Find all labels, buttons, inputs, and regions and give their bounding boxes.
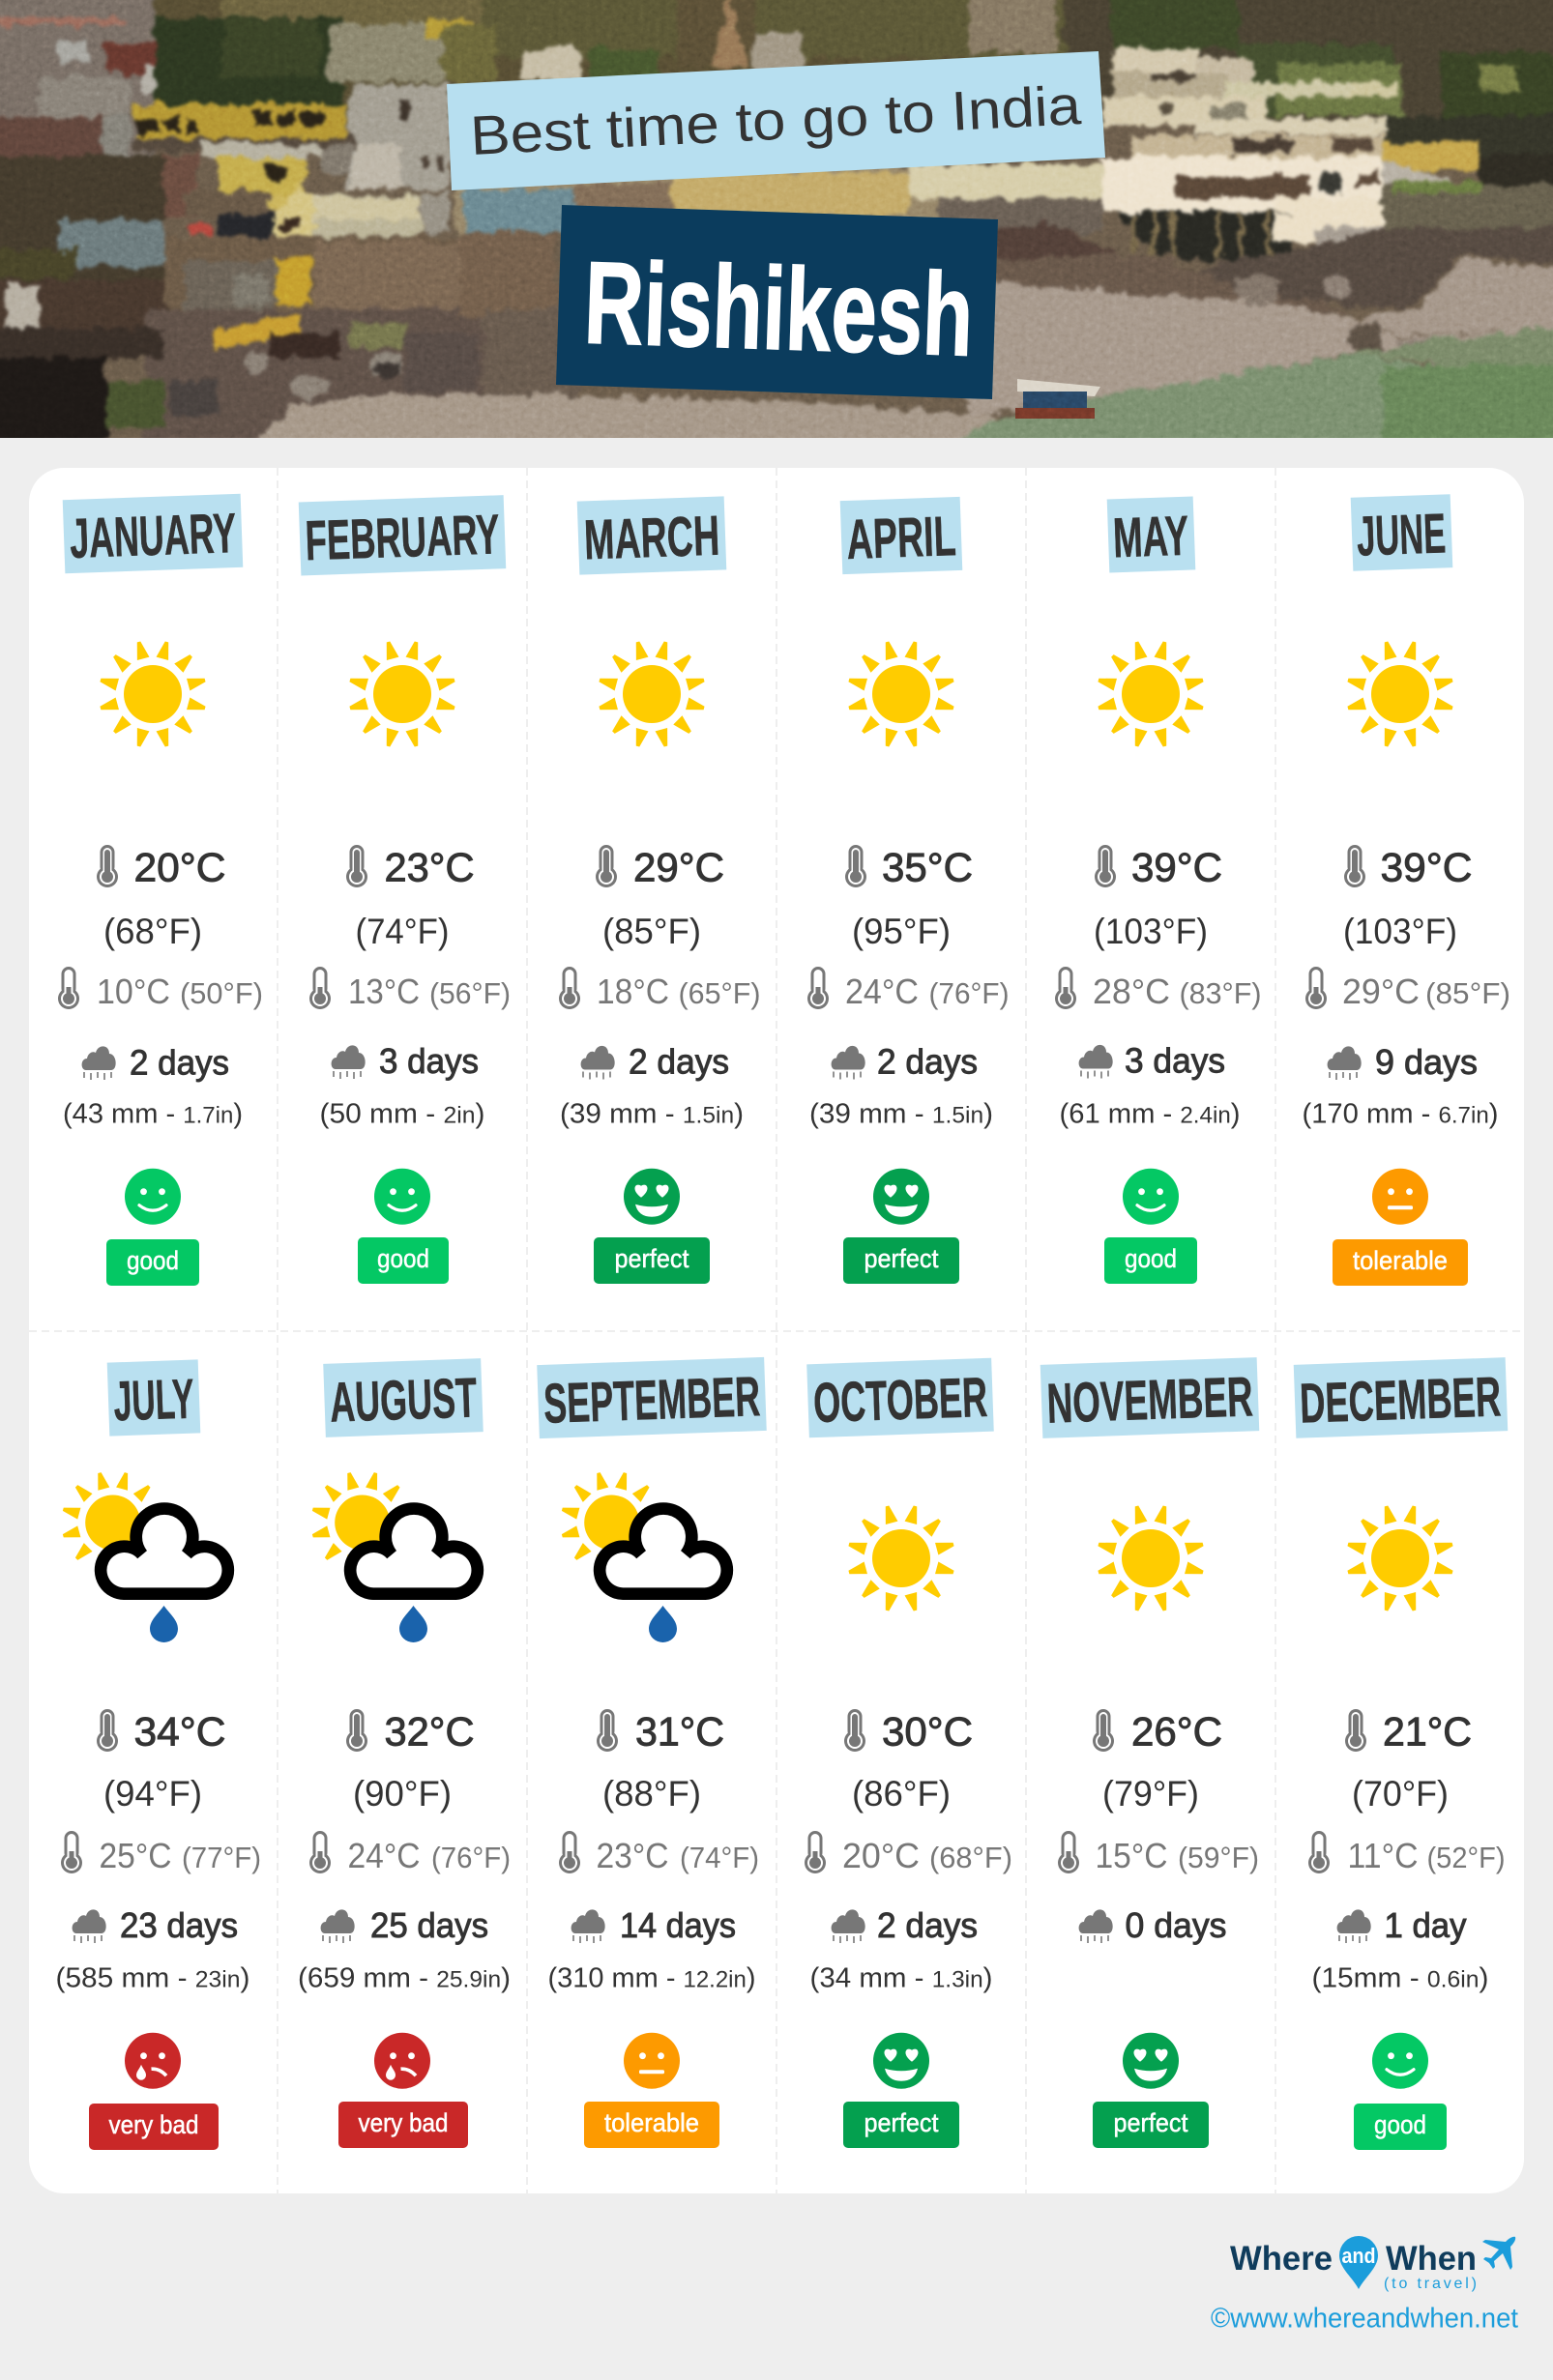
high temperature fahrenheit: (85°F): [602, 912, 701, 951]
low temperature: 10°C: [97, 972, 170, 1011]
icon: tolerable face: [1372, 1169, 1428, 1225]
icon: rain cloud: [1328, 1046, 1362, 1080]
rainfall: (659 mm - 25.9in): [298, 1963, 511, 1994]
high temperature: 30°C: [882, 1709, 973, 1755]
rating badge: [1333, 1239, 1468, 1286]
icon: perfect face: [1123, 2033, 1179, 2089]
heading: November: [1040, 1357, 1259, 1438]
low temperature: 23°C: [596, 1836, 669, 1875]
icon: rain cloud: [1079, 1909, 1113, 1943]
heading: April: APRIL: [845, 505, 957, 571]
sand: [257, 389, 997, 438]
water: [961, 351, 1427, 438]
low temperature fahrenheit: (77°F): [182, 1841, 261, 1874]
icon: sun behind rain cloud: [311, 1471, 478, 1642]
rainy days: 0 days: [1126, 1905, 1226, 1945]
high temperature fahrenheit: (86°F): [852, 1774, 951, 1814]
icon: thermometer high: [845, 845, 866, 887]
boat: [1015, 379, 1100, 419]
high temperature fahrenheit: (88°F): [602, 1774, 701, 1814]
rating badge: [594, 1237, 710, 1284]
panel: March: [559, 496, 760, 1284]
icon: thermometer low: [805, 1831, 826, 1873]
heading: February: FEBRUARY: [305, 503, 501, 572]
rainy days: 3 days: [379, 1041, 479, 1081]
low temperature fahrenheit: (65°F): [679, 976, 760, 1010]
icon: thermometer low: [1305, 967, 1327, 1009]
panel: July: [56, 1359, 261, 2150]
icon: map pin with and: and: [1342, 2244, 1375, 2268]
low temperature: 24°C: [845, 972, 919, 1011]
icon: sun behind rain cloud: [62, 1471, 228, 1642]
high temperature fahrenheit: (90°F): [353, 1774, 452, 1814]
rating badge: [1354, 2104, 1447, 2150]
rainfall: (43 mm - 1.7in): [63, 1099, 243, 1130]
right hotel: [1112, 48, 1199, 73]
high temperature: 20°C: [133, 845, 226, 890]
low temperature fahrenheit: (85°F): [1425, 976, 1510, 1010]
right wall and rocks: [1383, 142, 1480, 171]
panel: November: [1040, 1357, 1259, 2148]
icon: sun behind rain cloud: [561, 1471, 727, 1642]
icon: sun: [1097, 640, 1205, 748]
heading: September: [537, 1357, 767, 1438]
wall and rubble: [213, 232, 280, 249]
heading: June: JUNE: [1356, 502, 1447, 568]
low temperature: 29°C: [1342, 972, 1420, 1011]
rating badge: good: [377, 1244, 429, 1273]
icon: thermometer high: [346, 1709, 367, 1752]
high temperature fahrenheit: (74°F): [356, 912, 449, 951]
icon: perfect face: [873, 2033, 929, 2089]
rainfall: (39 mm - 1.5in): [560, 1099, 744, 1130]
high temperature fahrenheit: (103°F): [1094, 912, 1208, 951]
logo word: When: When: [1386, 2240, 1477, 2278]
low temperature: 25°C: [99, 1836, 172, 1875]
icon: thermometer low: [61, 1831, 82, 1873]
rating badge: [1093, 2102, 1209, 2148]
icon: thermometer low: [559, 1831, 580, 1873]
icon: rain cloud: [332, 1045, 366, 1079]
low temperature fahrenheit: (83°F): [1180, 976, 1261, 1010]
heading: July: JULY: [112, 1368, 195, 1433]
header photo: Rishikesh riverside: [0, 0, 1553, 467]
rainy days: 2 days: [130, 1043, 229, 1083]
panel: January: [58, 494, 263, 1286]
heading: July: [107, 1359, 200, 1437]
high temperature fahrenheit: (95°F): [852, 912, 951, 951]
panel: February: [299, 495, 511, 1284]
icon: good face: [125, 1169, 181, 1225]
rating badge: [584, 2102, 719, 2148]
heading: April: [840, 497, 962, 574]
rating badge: [358, 1237, 449, 1284]
rating badge: [106, 1239, 199, 1286]
high temperature: 26°C: [1131, 1709, 1222, 1755]
icon: thermometer high: [596, 845, 617, 887]
icon: plane: [1482, 2237, 1515, 2270]
rainy days: 9 days: [1375, 1042, 1478, 1082]
heading: September: SEPTEMBER: [542, 1365, 761, 1436]
high temperature: 21°C: [1383, 1709, 1472, 1755]
centre buildings: [679, 0, 753, 56]
icon: thermometer high: [97, 1709, 118, 1752]
rainfall: (170 mm - 6.7in): [1302, 1099, 1499, 1130]
high temperature: 35°C: [882, 845, 973, 890]
rainy days: 14 days: [620, 1905, 736, 1945]
icon: thermometer low: [559, 967, 580, 1009]
panel: September: [537, 1357, 767, 2148]
copyright url: ©www.whereandwhen.net: [1211, 2304, 1518, 2335]
rating badge: tolerable: [1353, 1246, 1448, 1275]
rainy days: 2 days: [877, 1905, 978, 1945]
rating badge: [843, 1237, 959, 1284]
panel: October: [805, 1358, 1012, 2148]
high temperature fahrenheit: (103°F): [1343, 912, 1457, 951]
rainy days: 25 days: [370, 1905, 488, 1945]
icon: tolerable face: [624, 2033, 680, 2089]
icon: good face: [374, 1169, 430, 1225]
icon: thermometer high: [844, 1709, 865, 1752]
rating badge: perfect: [864, 1244, 939, 1273]
low temperature: 13°C: [348, 972, 420, 1011]
icon: thermometer high: [1095, 845, 1116, 887]
panel: April: [807, 497, 1010, 1284]
icon: sun: [1346, 1504, 1454, 1612]
low temperature fahrenheit: (52°F): [1427, 1841, 1505, 1874]
rainfall: (39 mm - 1.5in): [809, 1099, 993, 1130]
icon: thermometer high: [346, 845, 367, 887]
icon: perfect face: [624, 1169, 680, 1225]
low temperature: 20°C: [842, 1836, 920, 1875]
icon: rain cloud: [832, 1909, 865, 1943]
heading: May: [1107, 496, 1195, 573]
low temperature fahrenheit: (76°F): [431, 1841, 511, 1874]
icon: perfect face: [873, 1169, 929, 1225]
icon: rain cloud: [581, 1046, 615, 1079]
icon: rain cloud: [832, 1046, 865, 1079]
rating badge: tolerable: [604, 2108, 699, 2137]
rating badge: very bad: [108, 2110, 199, 2139]
heading: October: [806, 1358, 994, 1437]
icon: rain cloud: [73, 1909, 106, 1943]
low temperature: 28°C: [1093, 972, 1170, 1011]
heading: November: NOVEMBER: [1046, 1365, 1254, 1436]
icon: rain cloud: [1337, 1909, 1371, 1943]
rating badge: good: [127, 1246, 179, 1275]
rainfall: (50 mm - 2in): [319, 1099, 485, 1130]
icon: sun: [598, 640, 706, 748]
rainfall: (34 mm - 1.3in): [810, 1963, 992, 1994]
high temperature: 34°C: [133, 1709, 226, 1755]
rainy days: 23 days: [120, 1905, 238, 1945]
rating badge: good: [1125, 1244, 1177, 1273]
high temperature: 39°C: [1381, 845, 1472, 890]
rating badge: perfect: [1114, 2108, 1188, 2137]
icon: thermometer high: [1345, 1709, 1366, 1752]
panel: December: [1294, 1357, 1508, 2150]
rainfall: (585 mm - 23in): [56, 1963, 249, 1994]
rating badge: [843, 2102, 959, 2148]
low temperature fahrenheit: (68°F): [929, 1841, 1012, 1874]
rainy days: 2 days: [877, 1042, 978, 1081]
left buildings: [0, 0, 155, 155]
icon: thermometer high: [597, 1709, 618, 1752]
icon: rain cloud: [571, 1909, 605, 1943]
panel: August: [298, 1358, 511, 2148]
title banner: Best time to go to India: Best time to go to India: [469, 74, 1083, 167]
low temperature fahrenheit: (74°F): [680, 1841, 759, 1874]
icon: thermometer high: [97, 845, 118, 887]
rating badge: very bad: [358, 2108, 449, 2137]
rating badge: good: [1374, 2110, 1426, 2139]
low temperature fahrenheit: (56°F): [429, 976, 511, 1010]
rating badge: [89, 2104, 219, 2150]
rating badge: [338, 2102, 468, 2148]
high temperature fahrenheit: (79°F): [1102, 1774, 1199, 1814]
icon: rain cloud: [82, 1046, 116, 1080]
months card: [29, 468, 1524, 2193]
heading: October: OCTOBER: [812, 1366, 988, 1435]
heading: May: MAY: [1112, 505, 1189, 569]
rating badge: perfect: [864, 2108, 939, 2137]
title banner: Rishikesh: [556, 205, 998, 399]
rainy days: 3 days: [1125, 1040, 1225, 1081]
rainfall: (61 mm - 2.4in): [1060, 1099, 1240, 1130]
icon: rain cloud: [321, 1909, 355, 1943]
heading: March: [577, 496, 726, 575]
title banner: Best time to go to India: [447, 51, 1105, 190]
rainfall: (15mm - 0.6in): [1311, 1963, 1489, 1994]
icon: thermometer low: [1058, 1831, 1079, 1873]
logo word: Where: Where: [1230, 2240, 1333, 2278]
icon: good face: [1123, 1169, 1179, 1225]
low temperature fahrenheit: (76°F): [928, 976, 1010, 1010]
high temperature fahrenheit: (70°F): [1352, 1774, 1449, 1814]
icon: thermometer high: [1344, 845, 1365, 887]
heading: August: AUGUST: [329, 1366, 478, 1435]
rainy days: 2 days: [629, 1042, 729, 1081]
icon: thermometer low: [807, 967, 829, 1009]
icon: thermometer low: [1055, 967, 1076, 1009]
icon: thermometer low: [1308, 1831, 1330, 1873]
high temperature: 23°C: [385, 845, 474, 890]
icon: good face: [1372, 2033, 1428, 2089]
panel: June: [1302, 494, 1510, 1286]
rainy days: 1 day: [1385, 1905, 1466, 1945]
logo tagline: (to travel): [1384, 2276, 1477, 2292]
rainfall: (310 mm - 12.2in): [547, 1963, 756, 1994]
heading: June: [1351, 494, 1452, 571]
logo: Where and When: [1230, 2236, 1515, 2292]
icon: thermometer low: [309, 967, 331, 1009]
low temperature: 15°C: [1095, 1836, 1168, 1875]
low temperature: 18°C: [597, 972, 669, 1011]
title banner: Rishikesh: Rishikesh: [582, 236, 976, 381]
heading: January: [63, 494, 243, 573]
high temperature: 39°C: [1131, 845, 1222, 890]
icon: map pin with and: [1339, 2236, 1378, 2289]
heading: August: [323, 1358, 483, 1437]
high temperature: 31°C: [635, 1709, 724, 1755]
icon: sun: [99, 640, 207, 748]
icon: sun: [1097, 1504, 1205, 1612]
low temperature: 11°C: [1348, 1836, 1418, 1875]
low temperature fahrenheit: (50°F): [180, 976, 263, 1010]
panel: May: [1055, 496, 1261, 1284]
icon: sun: [847, 640, 955, 748]
icon: thermometer low: [309, 1831, 331, 1873]
low temperature: 24°C: [348, 1836, 420, 1875]
icon: sun: [1346, 640, 1454, 748]
high temperature: 29°C: [633, 845, 724, 890]
icon: rain cloud: [1079, 1045, 1113, 1079]
rating badge: perfect: [615, 1244, 689, 1273]
icon: very bad face: [125, 2033, 181, 2089]
low temperature fahrenheit: (59°F): [1178, 1841, 1259, 1874]
left tree, bare branches: [0, 155, 164, 280]
heading: February: [299, 495, 506, 575]
high temperature fahrenheit: (94°F): [103, 1774, 202, 1814]
heading: March: MARCH: [583, 505, 720, 571]
high temperature: 32°C: [385, 1709, 474, 1755]
rating badge: [1104, 1237, 1197, 1284]
icon: thermometer low: [58, 967, 79, 1009]
icon: thermometer high: [1093, 1709, 1114, 1752]
icon: sun: [348, 640, 456, 748]
icon: sun: [847, 1504, 955, 1612]
heading: January: JANUARY: [69, 502, 237, 570]
high temperature fahrenheit: (68°F): [103, 912, 202, 951]
icon: very bad face: [374, 2033, 430, 2089]
